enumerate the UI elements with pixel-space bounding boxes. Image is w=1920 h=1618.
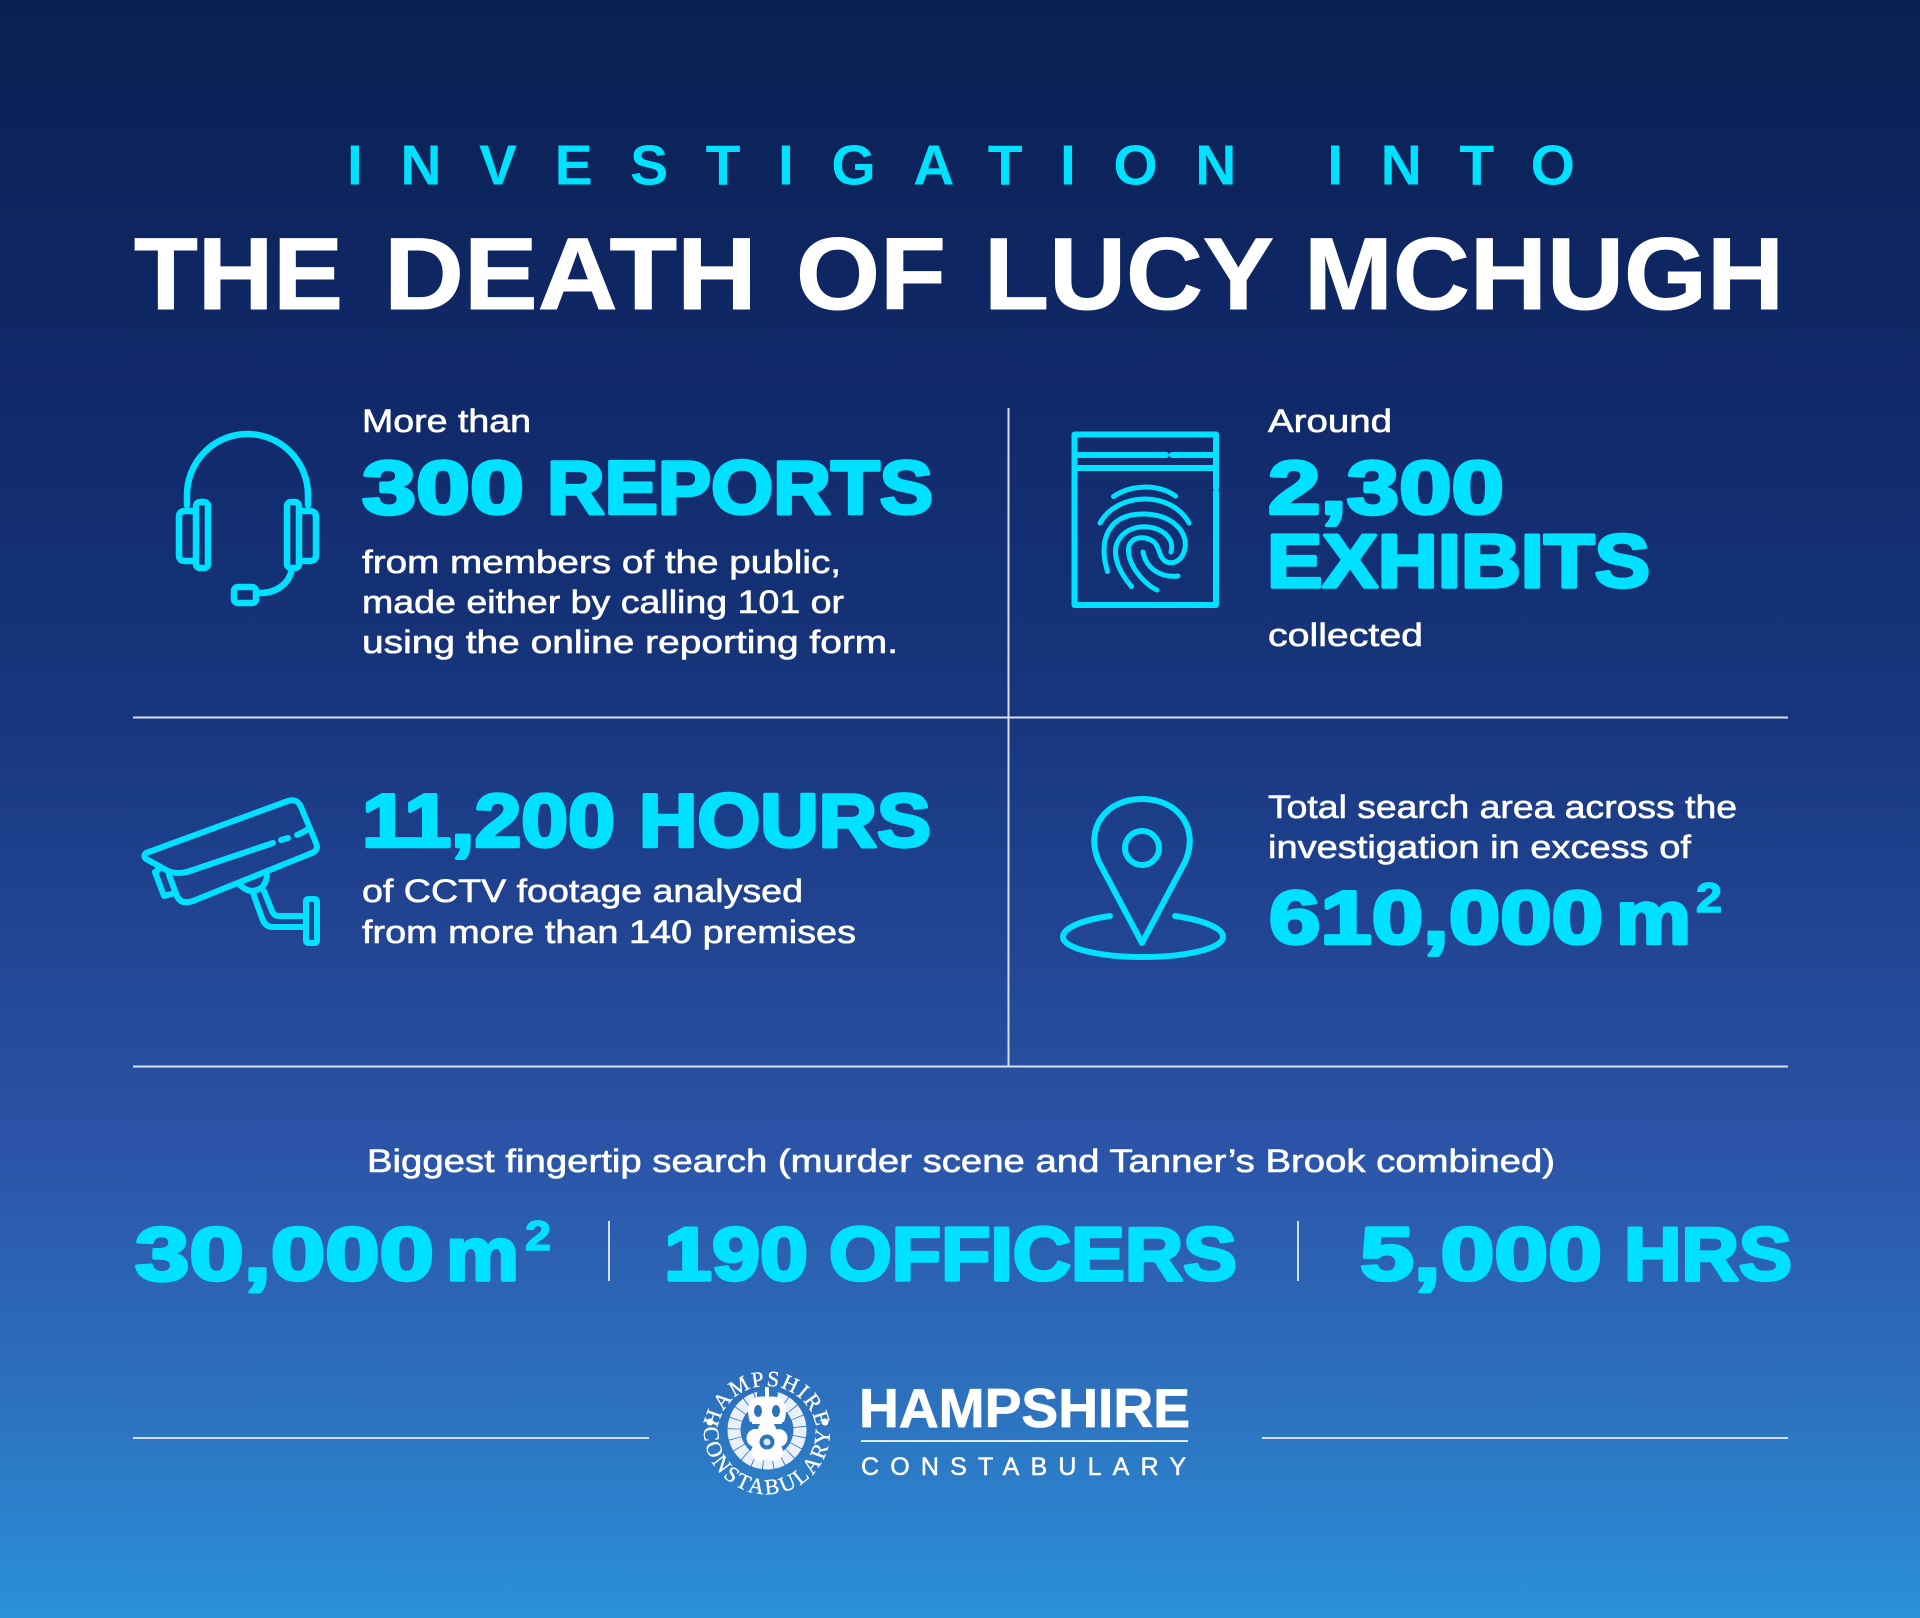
stat: 30,000 square metres: 2 [525,1212,551,1259]
text: reports description [362,544,898,660]
title line: the death of lucy mchugh [134,217,1784,331]
text: more than: More than [362,403,531,439]
stat: 2,300 exhibits: 2,300 [1268,446,1504,530]
seal: HAMPSHIRE [703,1372,830,1428]
text: cctv description: from more than 140 premises [362,914,856,950]
stat: 300 reports: REPORTS [547,446,933,530]
panel: reports [179,403,933,660]
stat: 610,000 square metres [1269,874,1722,960]
text: around: Around [1268,403,1392,439]
text: cctv description: of CCTV footage analysed [362,873,803,909]
stat: 11,200 hours [362,778,931,862]
text: reports description: from members of the public, [362,544,841,580]
text: search area description [1268,789,1737,865]
wordmark: HAMPSHIRE [859,1377,1190,1439]
stat: 190 officers: OFFICERS [829,1212,1237,1296]
stat: 5,000 hrs: HRS [1624,1212,1792,1296]
stat: 11,200 hours: HOURS [639,778,931,862]
seal: CONSTABULARY [704,1427,830,1495]
stat: 5,000 hrs [1360,1212,1792,1296]
icon: headset [179,434,316,603]
title line: investigation into: INVESTIGATION INTO [347,134,1575,198]
text: search area description: Total search area across the [1268,789,1737,825]
panel: cctv [144,778,931,950]
wordmark: CONSTABULARY [861,1453,1186,1481]
stat: 610,000 square metres: m [1616,876,1691,960]
stat: 190 officers: 190 [664,1212,808,1296]
panel: search area [1063,789,1737,960]
text: search area description: investigation in excess of [1268,829,1691,865]
fingertip search stats [135,1212,1792,1296]
stat: 610,000 square metres: 2 [1696,874,1722,921]
stat: 11,200 hours: 11,200 [362,778,615,862]
icon: map pin [1063,799,1223,957]
text: collected: collected [1268,617,1423,653]
logo: hampshire constabulary [703,1372,1190,1495]
title line: the death of lucy mchugh: LUCY [984,217,1274,331]
icon: cctv camera [144,800,317,943]
title line: the death of lucy mchugh: MCHUGH [1304,217,1784,331]
fingertip search heading: Biggest fingertip search (murder scene and Tanner’s Brook combined) [367,1143,1555,1179]
title [134,134,1784,331]
title line: the death of lucy mchugh: THE [134,217,343,331]
footer rules [133,1437,1788,1439]
stat: 300 reports [362,446,933,530]
stat: 2,300 exhibits [1267,446,1650,603]
icon: fingerprint document [1074,434,1216,605]
stat: 30,000 square metres [135,1212,551,1296]
stat: 5,000 hrs: 5,000 [1360,1212,1602,1296]
wordmark [859,1377,1190,1481]
stat: 2,300 exhibits: EXHIBITS [1267,519,1650,603]
stat: 30,000 square metres: m [446,1212,519,1296]
seal [703,1372,830,1495]
stat: 30,000 square metres: 30,000 [135,1212,434,1296]
text: reports description: made either by calling 101 or [362,584,844,620]
panel: exhibits [1074,403,1650,653]
text: reports description: using the online reporting form. [362,624,898,660]
grid dividers [133,408,1788,1067]
title line: the death of lucy mchugh: OF [796,217,946,331]
text: cctv description [362,873,856,950]
stat: 300 reports: 300 [362,446,524,530]
stat: 190 officers [664,1212,1237,1296]
title line: the death of lucy mchugh: DEATH [384,217,757,331]
stat: 610,000 square metres: 610,000 [1269,876,1603,960]
